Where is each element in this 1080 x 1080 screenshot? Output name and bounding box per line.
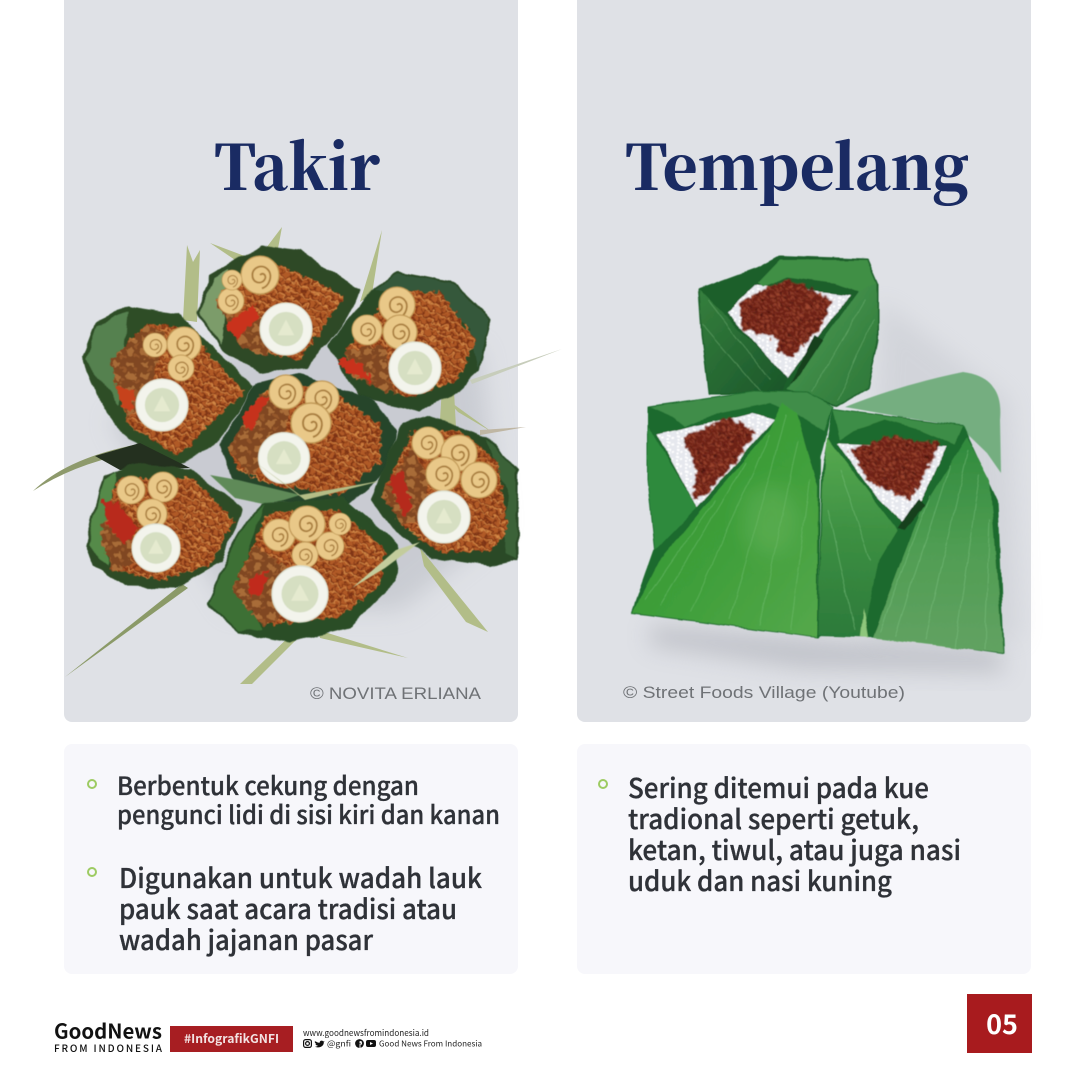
parcel: front right <box>818 410 1003 653</box>
footer social links <box>303 1027 482 1050</box>
bullet text 2: wadah jajanan pasar <box>119 919 374 958</box>
hashtag badge <box>170 1026 293 1052</box>
bowl: bottom <box>209 500 420 640</box>
parcel: right back leaf <box>845 372 1001 473</box>
heading: Tempelang: Tempelang <box>625 119 969 208</box>
credit: Novita Erliana: © NOVITA ERLIANA <box>310 684 482 703</box>
bowl: center <box>210 375 396 505</box>
panel: Takir description <box>64 744 518 974</box>
bowl: bottom left <box>87 443 240 586</box>
bullet list: Takir points <box>88 767 500 958</box>
bullet text 2: pauk saat acara tradisi atau <box>119 888 457 927</box>
bowl: top right <box>330 273 489 410</box>
icon: youtube <box>366 1040 376 1047</box>
icon: twitter <box>315 1041 325 1047</box>
heading: Takir: Takir <box>214 119 381 208</box>
bullet text: uduk dan nasi kuning <box>628 860 892 899</box>
bowl: top <box>199 247 358 372</box>
footer social links: @gnfi <box>327 1038 351 1050</box>
panel: Tempelang description <box>577 744 1031 974</box>
bullet text 1: pengunci lidi di sisi kiri dan kanan <box>117 796 500 832</box>
bullet list: Tempelang points <box>599 767 961 899</box>
bullet marker 1 <box>88 780 96 788</box>
photo illustration: takir leaf bowls <box>33 227 562 684</box>
logo: GoodNews From Indonesia: GoodNews <box>54 1016 162 1044</box>
hashtag badge: #InfografikGNFI <box>184 1030 279 1047</box>
panel: Takir image card <box>64 0 518 722</box>
bullet text: Sering ditemui pada kue <box>628 767 929 806</box>
parcel: back <box>700 257 877 405</box>
page number badge: 05 <box>986 1003 1018 1042</box>
bullet text 2 <box>119 857 482 958</box>
footer social links: Good News From Indonesia <box>379 1038 482 1050</box>
parcel: front left <box>633 392 833 637</box>
photo illustration: tempelang leaf parcels <box>633 257 1020 672</box>
bullet text: tradional seperti getuk, <box>628 798 919 837</box>
bullet text 1: Berbentuk cekung dengan <box>117 767 419 803</box>
bowl: right <box>372 418 516 565</box>
bullet text 1 <box>117 767 500 832</box>
bullet text 2: Digunakan untuk wadah lauk <box>119 857 482 896</box>
icon: facebook <box>355 1039 364 1048</box>
bullet marker 2 <box>88 868 96 876</box>
page number badge <box>967 994 1032 1053</box>
panel: Tempelang image card <box>577 0 1031 722</box>
icon: instagram <box>304 1040 311 1047</box>
credit: Street Foods Village: © Street Foods Village (Youtube) <box>623 683 905 702</box>
bullet text <box>628 767 961 899</box>
footer social links: www.goodnewsfromindonesia.id <box>303 1027 429 1039</box>
bullet marker <box>599 780 607 788</box>
logo: GoodNews From Indonesia: FROM INDONESIA <box>54 1040 163 1055</box>
bowl: left <box>84 308 252 462</box>
bullet text: ketan, tiwul, atau juga nasi <box>628 829 961 868</box>
